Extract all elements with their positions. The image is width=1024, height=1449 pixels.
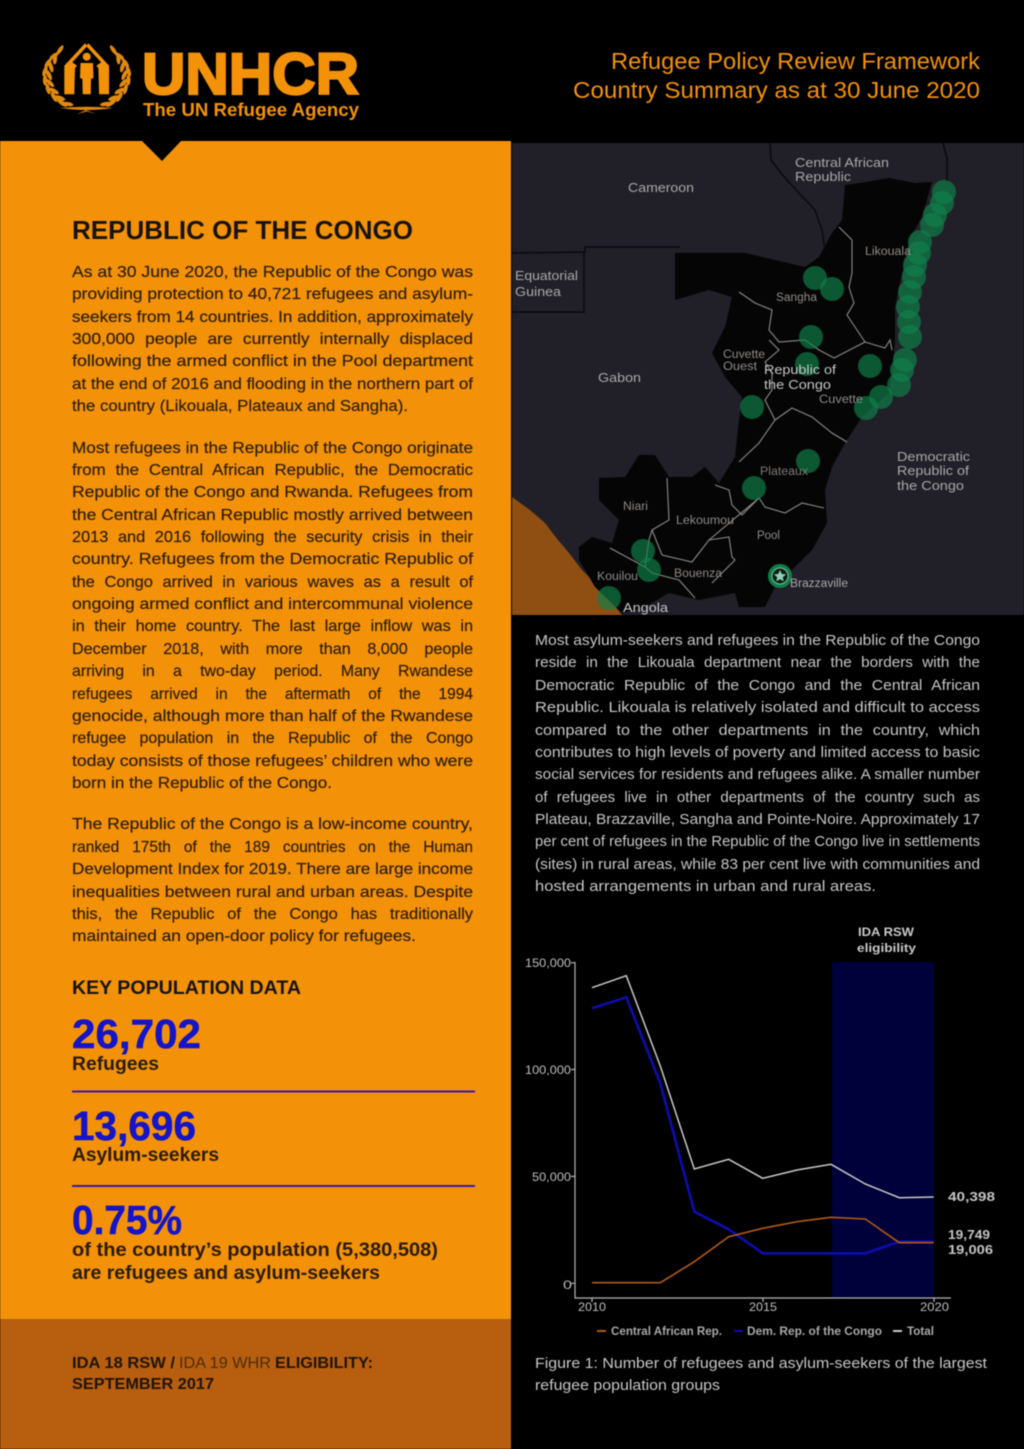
map labels: Kouilou — [597, 571, 638, 583]
series: Central African Rep. — [592, 1217, 934, 1283]
logo wordmark: UNHCR — [142, 42, 359, 107]
stat: refugees: 26,702 — [72, 1011, 201, 1057]
axes — [571, 962, 951, 1302]
text block: paragraph 2: born in the Republic of the Congo. — [72, 775, 332, 792]
text block: right column description: contributes to high levels of poverty and limited access to basic — [535, 744, 981, 761]
heading: REPUBLIC OF THE CONGO — [72, 215, 413, 245]
text block: paragraph 2: December 2018, with more than 8,000 people — [72, 641, 473, 658]
text block: paragraph 2: today consists of those refugees’ children who were — [72, 753, 473, 770]
icon: Brazzaville capital marker — [768, 564, 792, 588]
line chart — [525, 925, 995, 1338]
chart legend — [597, 1326, 934, 1338]
text block: paragraph 3: The Republic of the Congo is a low-income country, — [72, 816, 473, 833]
map labels: Republic of — [897, 464, 970, 478]
map labels: Republic — [795, 170, 851, 184]
figure caption: Figure 1: Number of refugees and asylum-seekers of the largest — [535, 1355, 988, 1372]
stat: population share — [72, 1197, 438, 1284]
header title: Country Summary as at 30 June 2020 — [573, 77, 980, 103]
panel: IDA eligibility: IDA 18 RSW / — [72, 1355, 176, 1372]
neighbouring borders — [512, 143, 947, 312]
map labels: Sangha — [776, 292, 818, 304]
IDA RSW eligibility band: IDA RSW — [858, 925, 915, 939]
map labels: Republic of — [764, 362, 836, 377]
text block: paragraph 1: seekers from 14 countries. In addition, approximately — [72, 309, 473, 326]
stat: population share: of the country’s population (5,380,508) — [72, 1240, 438, 1261]
text block: paragraph 2: Most refugees in the Republic of the Congo originate — [72, 440, 473, 457]
text block: paragraph 2: from the Central African Republic, the Democratic — [72, 462, 473, 479]
map labels: Brazzaville — [790, 578, 848, 590]
map labels: Democratic — [897, 450, 970, 464]
text block: paragraph 2: arriving in a two-day period. Many Rwandese — [72, 663, 473, 680]
map labels: Cameroon — [628, 181, 694, 195]
series end values — [948, 1189, 995, 1257]
panel: IDA eligibility: SEPTEMBER 2017 — [72, 1376, 214, 1393]
chart legend: Dem. Rep. of the Congo — [747, 1326, 882, 1338]
series: total — [592, 976, 934, 1198]
map labels: Equatorial — [515, 269, 578, 283]
text block: paragraph 2: the Central African Republic mostly arrived between — [72, 507, 473, 524]
text block: paragraph 2: Republic of the Congo and Rwanda. Refugees from — [72, 484, 473, 501]
text block: paragraph 3: ranked 175th of the 189 countries on the Human — [72, 839, 473, 856]
heading: key population data: KEY POPULATION DATA — [72, 978, 301, 999]
series end values: 40,398 — [948, 1189, 995, 1204]
map labels: Ouest — [723, 361, 758, 373]
text block: paragraph 1: 300,000 people are currently internally displaced — [72, 331, 473, 348]
text block: right column description: of refugees live in other departments of the country such as — [535, 789, 980, 806]
text block: right column description — [535, 632, 981, 895]
stat: asylum-seekers: 13,696 — [72, 1103, 196, 1149]
text block: right column description: Democratic Republic of the Congo and the Central African — [535, 677, 980, 694]
Republic of the Congo shape — [579, 178, 932, 613]
text block: paragraph 3: maintained an open-door policy for refugees. — [72, 928, 416, 945]
map labels: the Congo — [764, 377, 831, 392]
map labels: Likouala — [865, 246, 912, 258]
map labels: Pool — [757, 530, 780, 542]
panel: IDA eligibility — [0, 1319, 511, 1449]
axis labels — [525, 956, 949, 1314]
axis labels: 0 — [563, 1278, 572, 1292]
text block: right column description: (sites) in rural areas, while 83 per cent live with communities and — [535, 856, 980, 873]
map labels: Central African — [795, 156, 889, 170]
text block: paragraph 3: Development Index for 2019. There are large income — [72, 861, 473, 878]
refugee location dots — [597, 180, 956, 610]
header — [0, 0, 1024, 141]
text block: right column description: compared to the other departments in the country, which — [535, 722, 980, 739]
map labels: Guinea — [515, 285, 561, 299]
text block: paragraph 2: genocide, although more than half of the Rwandese — [72, 708, 473, 725]
text block: paragraph 2: 2013 and 2016 following the security crisis in their — [72, 529, 474, 546]
text block: paragraph 1: the country (Likouala, Plateaux and Sangha). — [72, 398, 408, 415]
map labels: Angola — [623, 600, 669, 615]
panel: IDA eligibility: ELIGIBILITY: — [275, 1355, 373, 1372]
stat: asylum-seekers: Asylum-seekers — [72, 1145, 219, 1166]
series: Dem. Rep. of the Congo — [592, 997, 934, 1253]
axis labels: 2015 — [749, 1300, 777, 1314]
text block: paragraph 2: ongoing armed conflict and intercommunal violence — [72, 596, 473, 613]
text block: paragraph 1: following the armed conflict in the Pool department — [72, 353, 474, 370]
map labels: Lekoumou — [676, 515, 734, 527]
panel: IDA eligibility: IDA 19 WHR — [179, 1355, 271, 1372]
axis labels: 150,000 — [525, 956, 571, 970]
text block: paragraph 1: at the end of 2016 and flooding in the northern part of — [72, 376, 474, 393]
pointer — [142, 141, 181, 161]
text block: paragraph 1: providing protection to 40,721 refugees and asylum- — [72, 286, 473, 303]
text block: right column description: per cent of refugees in the Republic of the Congo live in settlements — [535, 833, 980, 850]
text block: right column description: reside in the Likouala department near the borders with the — [535, 654, 980, 671]
internal department borders — [610, 227, 892, 598]
text block: right column description: Plateau, Brazzaville, Sangha and Pointe-Noire. Approximately 17 — [535, 811, 980, 828]
stat: refugees — [72, 1011, 201, 1075]
text block: right column description: Most asylum-seekers and refugees in the Republic of the Congo — [535, 632, 980, 649]
map labels: Cuvette — [723, 349, 765, 361]
IDA RSW eligibility band: eligibility — [857, 941, 916, 955]
header title — [573, 48, 980, 103]
Angola enclave area — [512, 497, 622, 615]
figure caption: refugee population groups — [535, 1377, 720, 1394]
text block: paragraph 3: this, the Republic of the Congo has traditionally — [72, 906, 473, 923]
text block: paragraph 2: in their home country. The last large inflow was in — [72, 618, 473, 635]
axis labels: 2010 — [578, 1300, 606, 1314]
text block: paragraph 2: refugees arrived in the aftermath of the 1994 — [72, 686, 473, 703]
series end values: 19,006 — [948, 1242, 993, 1257]
map labels: Niari — [623, 501, 648, 513]
map labels: Plateaux — [760, 466, 808, 478]
stat: population share: 0.75% — [72, 1197, 182, 1243]
stat: population share: are refugees and asylum-seekers — [72, 1263, 380, 1284]
header title: Refugee Policy Review Framework — [611, 48, 980, 74]
text block: paragraph 2 — [72, 440, 474, 792]
figure caption — [535, 1355, 988, 1394]
map — [512, 143, 1024, 615]
map labels: Bouenza — [674, 568, 723, 580]
text block: paragraph 1: As at 30 June 2020, the Republic of the Congo was — [72, 264, 473, 281]
chart legend: Central African Rep. — [611, 1326, 722, 1338]
panel: left summary — [0, 141, 511, 1319]
stat: refugees: Refugees — [72, 1054, 159, 1075]
stat: asylum-seekers — [72, 1103, 219, 1166]
axis labels: 50,000 — [532, 1170, 571, 1184]
text block: right column description: Republic. Likouala is relatively isolated and difficult to access — [535, 699, 980, 716]
map labels — [515, 156, 970, 615]
icon: UNHCR emblem — [41, 42, 359, 120]
axis labels: 2020 — [920, 1300, 949, 1314]
text block: paragraph 2: country. Refugees from the Democratic Republic of — [72, 551, 474, 568]
map labels: Gabon — [598, 371, 641, 385]
text block: paragraph 3 — [72, 816, 473, 945]
text block: paragraph 2: refugee population in the Republic of the Congo — [72, 730, 473, 747]
map labels: Cuvette — [819, 394, 863, 406]
series end values: 19,749 — [948, 1227, 990, 1242]
axis labels: 100,000 — [525, 1063, 571, 1077]
map labels: the Congo — [897, 479, 964, 493]
text block: right column description: social services for residents and refugees alike. A smaller number — [535, 766, 980, 783]
text block: paragraph 2: the Congo arrived in various waves as a result of — [72, 574, 474, 591]
text block: right column description: hosted arrangements in urban and rural areas. — [535, 878, 876, 895]
logo wordmark: The UN Refugee Agency — [143, 100, 359, 120]
text block: paragraph 1 — [72, 264, 474, 415]
text block: paragraph 3: inequalities between rural and urban areas. Despite — [72, 884, 473, 901]
IDA RSW eligibility band — [832, 925, 934, 1298]
chart legend: Total — [907, 1326, 934, 1338]
